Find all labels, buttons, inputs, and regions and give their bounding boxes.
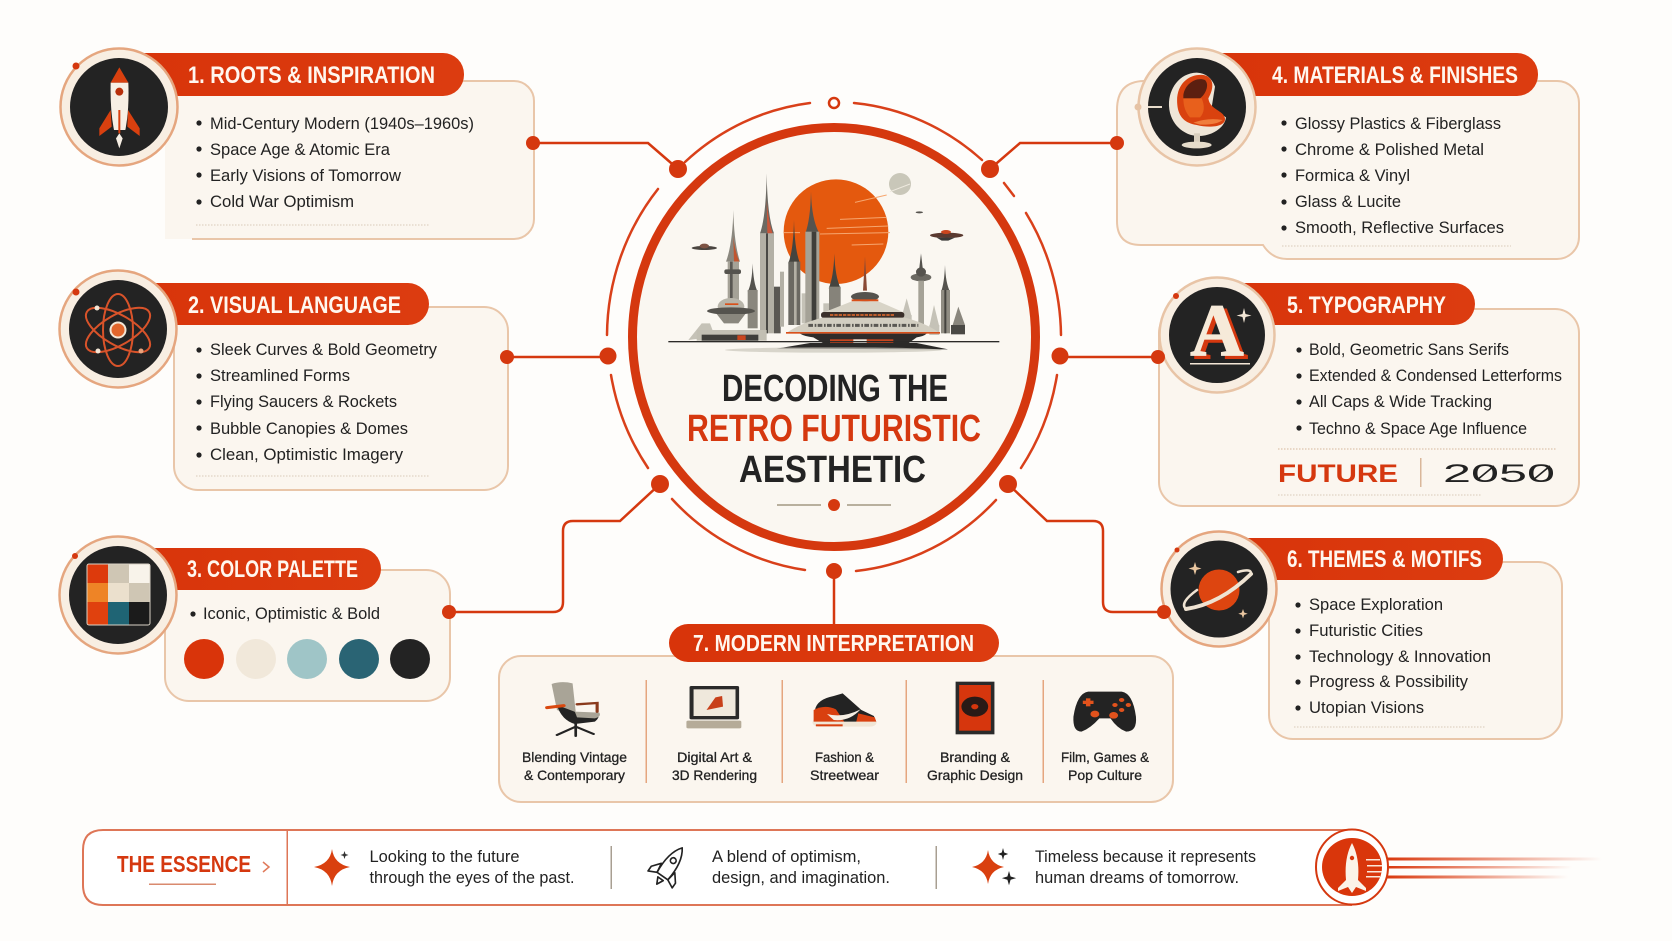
- text: timeless: [1035, 848, 1256, 887]
- title: [687, 368, 981, 491]
- bullet list: Space Exploration: [1309, 596, 1443, 614]
- icon: rocket outline: [645, 839, 694, 893]
- icon: lounge chair: [547, 682, 600, 736]
- panel 7: modern interpretation: [499, 624, 1173, 802]
- heading: 5. TYPOGRAPHY: [1287, 292, 1446, 319]
- main circle: [632, 128, 1036, 546]
- icon: letter A: A: [1194, 293, 1248, 375]
- bullet list: [196, 115, 474, 211]
- heading: 6. THEMES & MOTIFS: [1287, 546, 1482, 573]
- icon: computer: [686, 686, 741, 728]
- icon: atom: [60, 270, 176, 388]
- bullet list: All Caps & Wide Tracking: [1309, 393, 1492, 411]
- banner: [1217, 283, 1475, 325]
- bullet list: Glass & Lucite: [1295, 193, 1401, 211]
- item captions: [522, 749, 1150, 783]
- banner: [1197, 53, 1538, 96]
- text: future: Looking to the future: [370, 848, 520, 866]
- text: timeless: Timeless because it represents: [1035, 848, 1256, 866]
- bullet list: Space Age & Atomic Era: [210, 141, 391, 159]
- banner: [119, 53, 464, 96]
- title: DECODING THE: [722, 368, 948, 410]
- heading: 1. ROOTS & INSPIRATION: [188, 62, 435, 89]
- panel body: [499, 656, 1173, 802]
- item captions: Branding &: [940, 749, 1011, 765]
- item captions: Digital Art &: [677, 749, 753, 765]
- item captions: 3D Rendering: [672, 767, 757, 783]
- bullet list: Sleek Curves & Bold Geometry: [210, 341, 438, 359]
- background towers: [688, 293, 939, 340]
- panel body: [1159, 309, 1579, 506]
- panel body: [165, 570, 450, 701]
- title: AESTHETIC: [739, 449, 926, 491]
- bullet list: Chrome & Polished Metal: [1295, 141, 1484, 159]
- bullet list: Flying Saucers & Rockets: [210, 393, 397, 411]
- bullet list: [1295, 596, 1491, 717]
- central hub: [600, 98, 1068, 579]
- panel body: [174, 307, 508, 490]
- icon: palette grid: [60, 536, 176, 654]
- text: timeless: human dreams of tomorrow.: [1035, 869, 1239, 887]
- speed lines: [1385, 858, 1602, 878]
- flying saucers: [692, 211, 963, 250]
- colour swatches: [184, 639, 430, 679]
- panel 1: roots and inspiration: [60, 48, 534, 239]
- heading: 4. MATERIALS & FINISHES: [1272, 62, 1518, 89]
- connector node: [1157, 605, 1171, 619]
- icon: sneaker: [812, 693, 877, 727]
- type samples: FUTURE: [1278, 460, 1398, 488]
- item captions: Streetwear: [810, 767, 879, 783]
- heading: 3. COLOR PALETTE: [187, 556, 358, 583]
- bullet list: Progress & Possibility: [1309, 673, 1469, 691]
- title: RETRO FUTURISTIC: [687, 408, 981, 450]
- bullet list: Clean, Optimistic Imagery: [210, 446, 404, 464]
- bar frame: [83, 830, 1352, 905]
- text: optimism: [712, 848, 890, 887]
- type samples: [1278, 458, 1555, 488]
- icon: sparkle: [314, 849, 350, 886]
- banner: [1219, 538, 1503, 580]
- panel 5: typography: [1151, 278, 1579, 506]
- item captions: Graphic Design: [927, 767, 1023, 783]
- bullet list: Mid-Century Modern (1940s–1960s): [210, 115, 474, 133]
- left towers: [724, 173, 841, 333]
- text: optimism: A blend of optimism,: [712, 848, 861, 866]
- bullet list: Futuristic Cities: [1309, 622, 1423, 640]
- panel body: [1269, 562, 1562, 739]
- heading: 2. VISUAL LANGUAGE: [188, 292, 401, 319]
- column separators: [646, 680, 1044, 783]
- right towers: [911, 253, 965, 334]
- sun streaks: [783, 195, 890, 245]
- icon: ringed planet: [1162, 532, 1276, 646]
- icon: egg chair: [1134, 48, 1256, 166]
- bullet list: [1281, 115, 1504, 237]
- panel 6: themes and motifs: [1157, 532, 1562, 739]
- icon: sparkles: [972, 848, 1016, 885]
- icon: game controller: [1073, 692, 1136, 732]
- bottom bar: the essence: [83, 830, 1602, 905]
- rocket badge: [1316, 830, 1388, 904]
- ground line: [668, 341, 999, 342]
- outer ring arcs: [607, 103, 1061, 571]
- bullet list: [1296, 341, 1562, 438]
- panel body: [1117, 81, 1579, 259]
- panel 2: visual language: [60, 270, 508, 490]
- item captions: & Contemporary: [524, 767, 625, 783]
- bullet list: [196, 341, 438, 464]
- bullet list: Glossy Plastics & Fiberglass: [1295, 115, 1501, 133]
- bullet list: Bubble Canopies & Domes: [210, 420, 408, 438]
- text: future: [370, 848, 574, 887]
- moon: [889, 173, 911, 195]
- icon: rocket: [60, 48, 178, 166]
- panel 4: materials and finishes: [1110, 48, 1579, 259]
- banner: [669, 624, 999, 662]
- item captions: Blending Vintage: [522, 749, 627, 765]
- title ornament: [777, 499, 891, 511]
- heading: 7. MODERN INTERPRETATION: [693, 630, 974, 656]
- item captions: Pop Culture: [1068, 767, 1142, 783]
- panel 3: color palette: [60, 536, 450, 701]
- icon: poster: [956, 682, 994, 734]
- bullet list: Extended & Condensed Letterforms: [1309, 367, 1562, 385]
- bullet list: Smooth, Reflective Surfaces: [1295, 219, 1504, 237]
- connector node: [1151, 350, 1165, 364]
- retro city illustration: [668, 173, 999, 353]
- banner: [118, 548, 381, 590]
- bullet list: Streamlined Forms: [210, 367, 350, 385]
- item captions: Film, Games &: [1061, 749, 1150, 765]
- bullet list: Bold, Geometric Sans Serifs: [1309, 341, 1509, 359]
- bullet list: Utopian Visions: [1309, 699, 1424, 717]
- bullet list: Techno & Space Age Influence: [1309, 420, 1527, 438]
- icon: letter A: [1160, 278, 1274, 392]
- text: future: through the eyes of the past.: [370, 869, 574, 887]
- bullet list: Formica & Vinyl: [1295, 167, 1410, 185]
- left saucer building: [697, 298, 767, 341]
- main saucer building: [786, 257, 940, 343]
- type samples: 2050: [1443, 460, 1555, 488]
- bullet: Iconic, Optimistic & Bold: [203, 605, 380, 623]
- connector lines: [449, 143, 1164, 626]
- connector node: [1110, 136, 1124, 150]
- bullet list: Early Visions of Tomorrow: [210, 167, 401, 185]
- bullet list: Cold War Optimism: [210, 193, 354, 211]
- bullet list: Technology & Innovation: [1309, 648, 1491, 666]
- sun: [784, 179, 888, 284]
- text: optimism: design, and imagination.: [712, 869, 890, 887]
- banner: [119, 283, 429, 325]
- ring nodes: [600, 98, 1068, 579]
- label: THE ESSENCE: [117, 851, 251, 877]
- left panel connector nodes: [442, 136, 540, 619]
- item captions: Fashion &: [815, 749, 875, 765]
- panel body: [165, 81, 534, 239]
- icon: letter A: A: [1190, 290, 1244, 372]
